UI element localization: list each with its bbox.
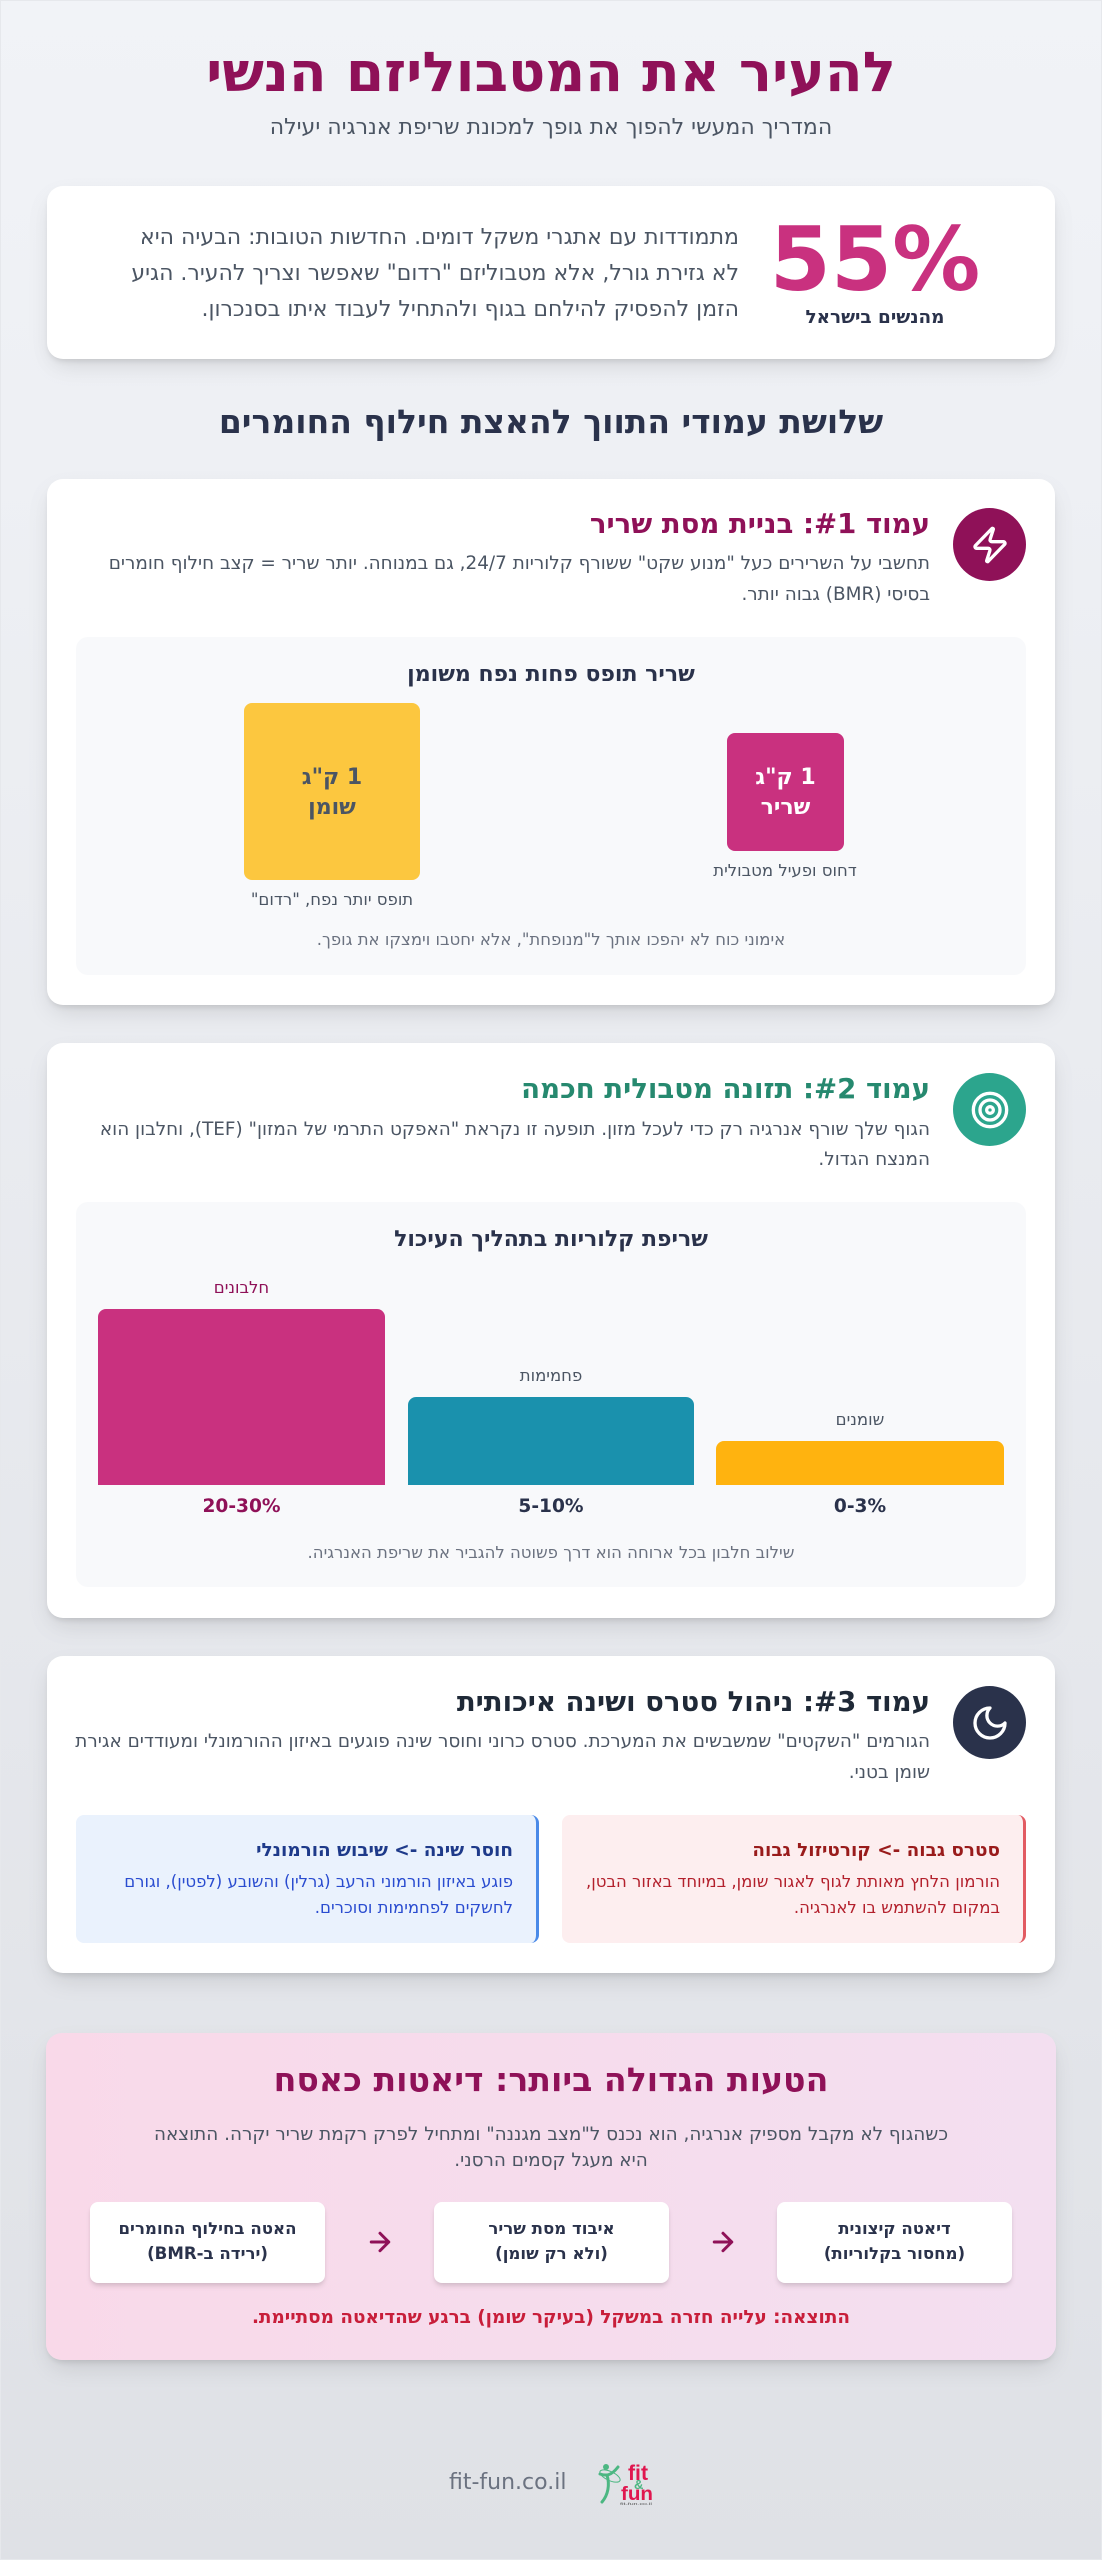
callout title: חוסר שינה -> שיבוש הורמונלי — [256, 1840, 513, 1861]
flow step 3: (ירידה ב-BMR) — [147, 2244, 268, 2263]
hero text: לא גזירת גורל, אלא מטבוליזם "רדום" שאפשר וצריך להעיר. הגיע — [131, 261, 739, 286]
panel: pillar 2 nutrition — [47, 1043, 1055, 1618]
logo: fit and fun: fit — [628, 2462, 648, 2485]
chart note: שילוב חלבון בכל ארוחה הוא דרך פשוטה להגביר את שריפת האנרגיה. — [308, 1542, 794, 1562]
pillar 2 description — [100, 1118, 930, 1170]
statistic label: מהנשים בישראל — [805, 307, 944, 328]
fat block: 1 ק"ג — [302, 765, 362, 790]
bar: protein: חלבונים — [214, 1278, 269, 1297]
hero text — [131, 225, 739, 322]
fat block — [244, 703, 420, 880]
bar: fats: 0-3% — [834, 1496, 886, 1517]
panel: pillar 3 stress and sleep — [47, 1656, 1055, 1973]
callout title: סטרס גבוה -> קורטיזול גבוה — [752, 1840, 1000, 1861]
pillar 3 description: הגורמים "השקטים" שמשבשים את המערכת. סטרס כרוני וחוסר שינה פוגעים באיזון ההורמונלי ומעודדים אגירת — [75, 1731, 930, 1752]
icon: moon — [953, 1686, 1026, 1759]
callout text: פוגע באיזון הורמוני הרעב (גרלין) והשובע (לפטין), וגורם — [124, 1872, 513, 1891]
hero text: הזמן להפסיק להילחם בגוף ולהתחיל לעבוד איתו בסנכרון. — [202, 297, 739, 322]
flow step 2 — [434, 2202, 669, 2283]
flow step 2: איבוד מסת שריר — [488, 2218, 615, 2238]
pillar 3 heading: עמוד #3: ניהול סטרס ושינה איכותית — [457, 1685, 930, 1718]
panel: calories burned in digestion bar chart — [76, 1202, 1026, 1587]
warning text: כשהגוף לא מקבל מספיק אנרגיה, הוא נכנס ל"מצב מגננה" ומתחיל לפרק רקמת שריר יקרה. התוצאה — [154, 2124, 948, 2145]
callout: high stress — [562, 1815, 1026, 1943]
panel: hero statistic — [47, 186, 1055, 359]
callout text: הורמון הלחץ מאותת לגוף לאגור שומן, במיוחד באזור הבטן, — [586, 1872, 1000, 1891]
warning heading: הטעות הגדולה ביותר: דיאטות כאסח — [274, 2060, 828, 2099]
bar: carbohydrates: פחמימות — [520, 1366, 582, 1385]
flow step 1: (מחסור בקלוריות) — [824, 2244, 965, 2263]
chart note: אימוני כוח לא יהפכו אותך ל"מנופחת", אלא יחטבו וימצקו את גופך. — [317, 930, 785, 948]
fat caption: תופס יותר נפח, "רדום" — [251, 890, 413, 908]
logo: fit and fun — [598, 2462, 653, 2506]
flow step 3: האטה בחילוף החומרים — [118, 2218, 296, 2238]
logo: fit and fun: fun — [621, 2484, 653, 2505]
bar: protein: 20-30% — [202, 1496, 281, 1517]
bar: carbohydrates: 5-10% — [518, 1496, 584, 1517]
footer website: fit-fun.co.il — [449, 2470, 566, 2495]
warning text — [154, 2124, 948, 2171]
arrow — [712, 2232, 734, 2252]
pillar 1 description: בסיסי (BMR) גבוה יותר. — [741, 584, 930, 604]
fat block: שומן — [308, 795, 356, 820]
arrow — [370, 2232, 390, 2252]
section heading: שלושת עמודי התווך להאצת חילוף החומרים — [219, 402, 883, 440]
chart title: שריר תופס פחות נפח משומן — [407, 662, 695, 687]
pillar 3 description: שומן בטני. — [849, 1762, 930, 1782]
subtitle: המדריך המעשי להפוך את גופך למכונת שריפת אנרגיה יעילה — [270, 114, 832, 140]
pillar 2 description: המנצח הגדול. — [818, 1148, 930, 1170]
flow step 3 — [90, 2202, 325, 2283]
muscle block — [727, 732, 844, 850]
bar: fats: שומנים — [836, 1410, 884, 1429]
pillar 1 description: תחשבי על השרירים כעל "מנוע שקט" ששורף קלוריות 24/7, גם במנוחה. יותר שריר = קצב חילוף חומרים — [109, 553, 930, 574]
logo: fit and fun: fit-fun.co.il — [620, 2502, 652, 2506]
flow step 1 — [777, 2202, 1012, 2283]
pillar 1 heading: עמוד #1: בניית מסת שריר — [590, 507, 930, 540]
panel: biggest mistake crash diets — [46, 2033, 1056, 2360]
bar: fats — [716, 1410, 1004, 1517]
flow step 2: (ולא רק שומן) — [495, 2244, 608, 2263]
panel: pillar 1 muscle mass — [47, 479, 1055, 1005]
icon: target — [953, 1073, 1026, 1146]
pillar 1 description — [109, 553, 930, 604]
muscle caption: דחוס ופעיל מטבולית — [713, 860, 857, 880]
big number 55%: 55% — [770, 208, 980, 311]
flow step 1: דיאטה קיצונית — [838, 2218, 951, 2238]
chart title: שריפת קלוריות בתהליך העיכול — [394, 1226, 708, 1252]
panel: muscle vs fat comparison — [76, 637, 1026, 975]
result statement: התוצאה: עלייה חזרה במשקל (בעיקר שומן) ברגע שהדיאטה מסתיימת. — [252, 2307, 850, 2328]
warning text: היא מעגל קסמים הרסני. — [454, 2150, 648, 2171]
pillar 2 description: הגוף שלך שורף אנרגיה רק כדי לעכל מזון. תופעה זו נקראת "האפקט התרמי של המזון" (TEF), וחלבון הוא — [100, 1118, 930, 1140]
muscle block: 1 ק"ג — [755, 764, 816, 790]
callout: high stress: במקום להשתמש בו לאנרגיה. — [794, 1898, 1000, 1917]
muscle block: שריר — [761, 794, 810, 820]
hero text: מתמודדות עם אתגרי משקל דומים. החדשות הטובות: הבעיה היא — [140, 225, 739, 250]
callout: lack of sleep — [76, 1815, 539, 1943]
title: להעיר את המטבוליזם הנשי — [206, 40, 896, 104]
icon: lightning bolt — [953, 508, 1026, 581]
bar: protein — [98, 1278, 385, 1517]
bar: carbohydrates — [408, 1366, 694, 1517]
logo: fit and fun: & — [634, 2477, 643, 2492]
pillar 2 heading: עמוד #2: תזונה מטבולית חכמה — [521, 1072, 930, 1105]
pillar 3 description — [75, 1731, 930, 1782]
callout: lack of sleep: לחשקים לפחמימות וסוכרים. — [315, 1898, 513, 1917]
